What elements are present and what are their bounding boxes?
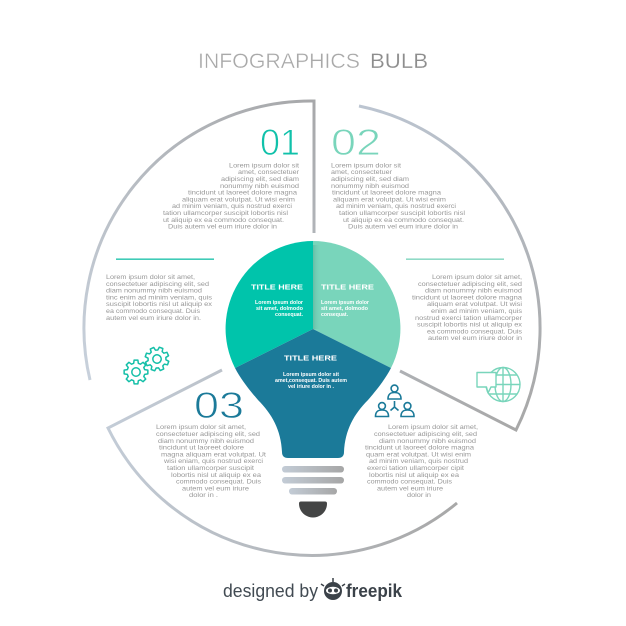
number 01: 01 [260, 122, 300, 163]
label: blue sector: Lorem ipsum dolor sit [283, 372, 339, 378]
freepik credit: freepik [346, 581, 403, 601]
text block 02: aliquam erat volutpat. Ut wisi enim [333, 196, 447, 203]
text block 04: Lorem ipsum dolor sit amet, [388, 424, 478, 431]
text block right: suscipit lobortis nisl ut aliquip ex [417, 322, 523, 329]
text block 03: diam nonummy nibh euismod [158, 438, 254, 445]
text block 01 [163, 162, 300, 231]
icon: freepik mascot [321, 578, 345, 600]
bulb base bars [282, 466, 344, 494]
text block 02: adipiscing elit, sed diam [331, 176, 410, 183]
text block 02: Duis autem vel eum iriure dolor in [348, 224, 458, 231]
text block 03: dolor in . [189, 492, 218, 499]
text block 02: Lorem ipsum dolor sit [331, 162, 401, 169]
text block 03: wisi eniam, quis nostrud exerci [163, 458, 264, 465]
text block left: tinc enim ad minim veniam, quis [106, 294, 213, 301]
text block 04: ad minim veniam, quis nostrud [369, 458, 468, 465]
text block 01: Lorem ipsum dolor sit [229, 162, 299, 169]
text block right: enim ad minim veniam, quis [431, 308, 523, 315]
label: blue sector: TITLE HERE [284, 354, 337, 363]
text block left: Lorem ipsum dolor sit amet, [106, 274, 195, 281]
bulb sector: teal [226, 241, 313, 368]
bulb sector: blue [235, 329, 391, 458]
text block 02: tation ullamcorper suscipit lobortis nisl [339, 210, 466, 217]
text block right: tincidunt ut laoreet dolore magna [412, 294, 522, 301]
number 03: 03 [194, 385, 244, 426]
text block left: consectetuer adipiscing elit, sed [106, 281, 209, 288]
text block 04: autem vel eum iriure [377, 485, 443, 492]
label: mint sector [321, 283, 374, 318]
text block left [106, 274, 213, 322]
text block 01: amet, consectetuer [238, 169, 300, 176]
text block 01: ut aliquip ex ea commodo consequat. [163, 217, 284, 224]
label: teal sector: sit amet, dolmodo [256, 306, 304, 312]
label: mint sector: sit amet, dolmodo [321, 306, 369, 312]
shadow on mint sector [313, 245, 321, 329]
ring segment 1 [84, 101, 314, 380]
text block right: autem vel eum iriure dolor in [428, 335, 522, 342]
text block 04: exerci tation ullamcorper cipit [367, 465, 464, 472]
label: blue sector: vel iriure dolor in . [288, 384, 334, 390]
text block 01: Duis autem vel eum iriure dolor in [168, 224, 277, 231]
text block left: diam nonummy nibh euismod [106, 288, 202, 295]
icon: gears [124, 344, 172, 384]
text block 03: commodo consequat. Duis [176, 479, 262, 486]
text block 03: magna aliquam erat volutpat. Ut [161, 451, 266, 458]
text block 03: Lorem ipsum dolor sit amet, [156, 424, 246, 431]
text block 03: tincidunt ut laoreet dolore [159, 445, 244, 452]
freepik credit [223, 578, 403, 601]
text block right: ea commodo consequat. Duis [427, 328, 523, 335]
title [198, 50, 428, 73]
label: teal sector: consequat. [275, 312, 303, 318]
text block 02: ut aliquip ex ea commodo consequat. [343, 217, 464, 224]
text block right: aliquam erat volutpat. Ut wisi [427, 301, 523, 308]
text block 01: tation ullamcorper suscipit lobortis nisl [163, 210, 289, 217]
text block 03: consectetuer adipiscing elit, sed [156, 431, 260, 438]
text block 01: aliquam erat volutpat. Ut wisi enim [182, 196, 296, 203]
label: teal sector [251, 283, 304, 318]
label: mint sector: Lorem ipsum dolor [321, 300, 370, 306]
text block right: nostrud exerci tation ullamcorper [415, 315, 523, 322]
label: teal sector: TITLE HERE [251, 283, 303, 292]
text block 01: adipiscing elit, sed diam [221, 176, 300, 183]
text block 01: ad minim veniam, quis nostrud exerci [172, 203, 293, 210]
text block 02: amet, consectetuer [331, 169, 393, 176]
text block 04: commodo consequat. Duis [367, 479, 453, 486]
icon: globe with speech bubble [477, 368, 520, 402]
divider right [406, 258, 504, 260]
text block right: consectetuer adipiscing elit, sed [418, 281, 522, 288]
text block 04: dolor in [407, 492, 431, 499]
freepik credit: designed by [223, 581, 318, 601]
text block right [412, 274, 523, 342]
text block 01: nonummy nibh euismod [220, 183, 299, 190]
text block right: diam nonummy nibh euismod [425, 288, 522, 295]
number 02: 02 [331, 122, 381, 163]
text block 04: quam erat volutpat. Ut wisi enim [366, 451, 472, 458]
title: INFOGRAPHICS [198, 50, 360, 73]
light bulb [226, 241, 400, 518]
ring segment 3 [108, 370, 457, 555]
text block 02: tincidunt ut laoreet dolore magna [332, 190, 441, 197]
icon: people network [376, 385, 414, 416]
text block 03: lobortis nisl ut aliquip ex ea [171, 472, 261, 479]
label: blue sector: amet,consequat. Duis autem [275, 378, 347, 384]
text block left: suscipit lobortis nisl ut aliquip ex [106, 301, 213, 308]
bulb sector: mint [313, 241, 400, 368]
text block right: Lorem ipsum dolor sit amet, [432, 274, 522, 281]
text block 02: nonummy nibh euismod [331, 183, 409, 190]
text block 02: ad minim veniam, quis nostrud exerci [336, 203, 457, 210]
text block 04: lobortis nisl ut aliquip ex ea [369, 472, 459, 479]
text block 03: autem vel eum iriure [182, 485, 249, 492]
text block 03 [156, 424, 266, 499]
text block 03: tation ullamcorper suscipit [167, 465, 254, 472]
label: teal sector: Lorem ipsum dolor [255, 300, 304, 306]
text block left: autem vel eum iriure dolor in. [106, 315, 201, 322]
text block 04: consectetuer adipiscing elit, sed [374, 431, 477, 438]
title: BULB [370, 50, 428, 73]
text block 04: tincidunt ut laoreet dolore magna [365, 445, 474, 452]
bulb tip [299, 502, 327, 518]
text block 01: tincidunt ut laoreet dolore magna [188, 190, 297, 197]
text block left: ea commodo consequat. Duis [106, 308, 201, 315]
label: blue sector [275, 354, 347, 390]
text block 02 [331, 162, 466, 231]
label: mint sector: consequat. [321, 312, 348, 318]
text block 04: diam nonummy nibh euismod [379, 438, 476, 445]
ring segment 2 [359, 106, 540, 430]
label: mint sector: TITLE HERE [321, 283, 374, 292]
divider left [116, 258, 214, 260]
text block 04 [365, 424, 478, 499]
